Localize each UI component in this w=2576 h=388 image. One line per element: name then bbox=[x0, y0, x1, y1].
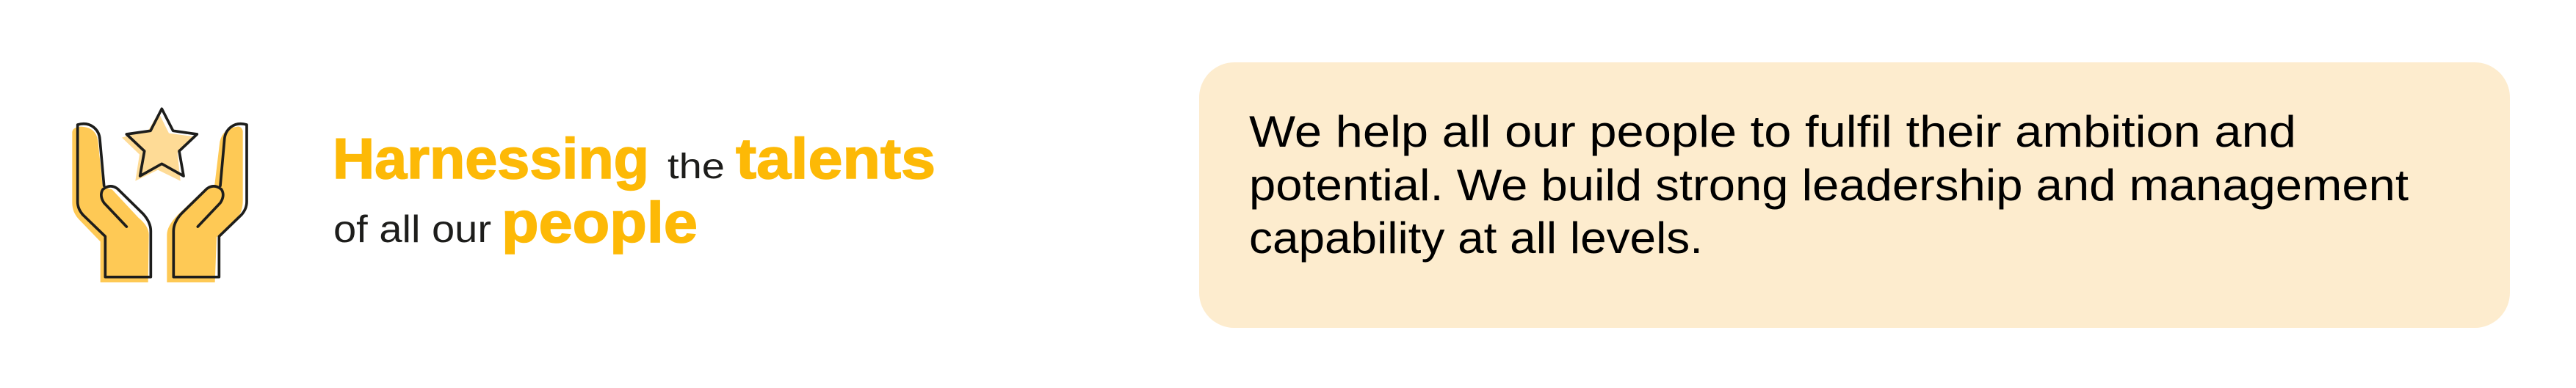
heading word: the: the bbox=[667, 147, 725, 186]
panel background bbox=[1199, 62, 2510, 328]
icon: left hand outline bbox=[78, 124, 151, 277]
heading word: talents: talents bbox=[736, 126, 936, 191]
body line 2: potential. We build strong leadership and management bbox=[1249, 161, 2409, 210]
heading bbox=[333, 126, 936, 255]
icon: left hand fill bbox=[72, 127, 149, 282]
body text bbox=[1249, 107, 2409, 263]
icon: right hand outline bbox=[173, 124, 247, 277]
icon: hands holding a star bbox=[72, 109, 247, 282]
icon: star outline bbox=[126, 109, 197, 176]
heading word: people: people bbox=[502, 190, 698, 255]
body line 3: capability at all levels. bbox=[1249, 213, 1703, 263]
icon: right hand fill bbox=[167, 127, 243, 282]
heading words: of all our: of all our bbox=[333, 208, 491, 251]
panel: description bbox=[1199, 62, 2510, 328]
body line 1: We help all our people to fulfil their ambition and bbox=[1249, 107, 2296, 156]
icon: star shadow fill bbox=[122, 112, 193, 181]
heading word: Harnessing: Harnessing bbox=[333, 126, 649, 191]
